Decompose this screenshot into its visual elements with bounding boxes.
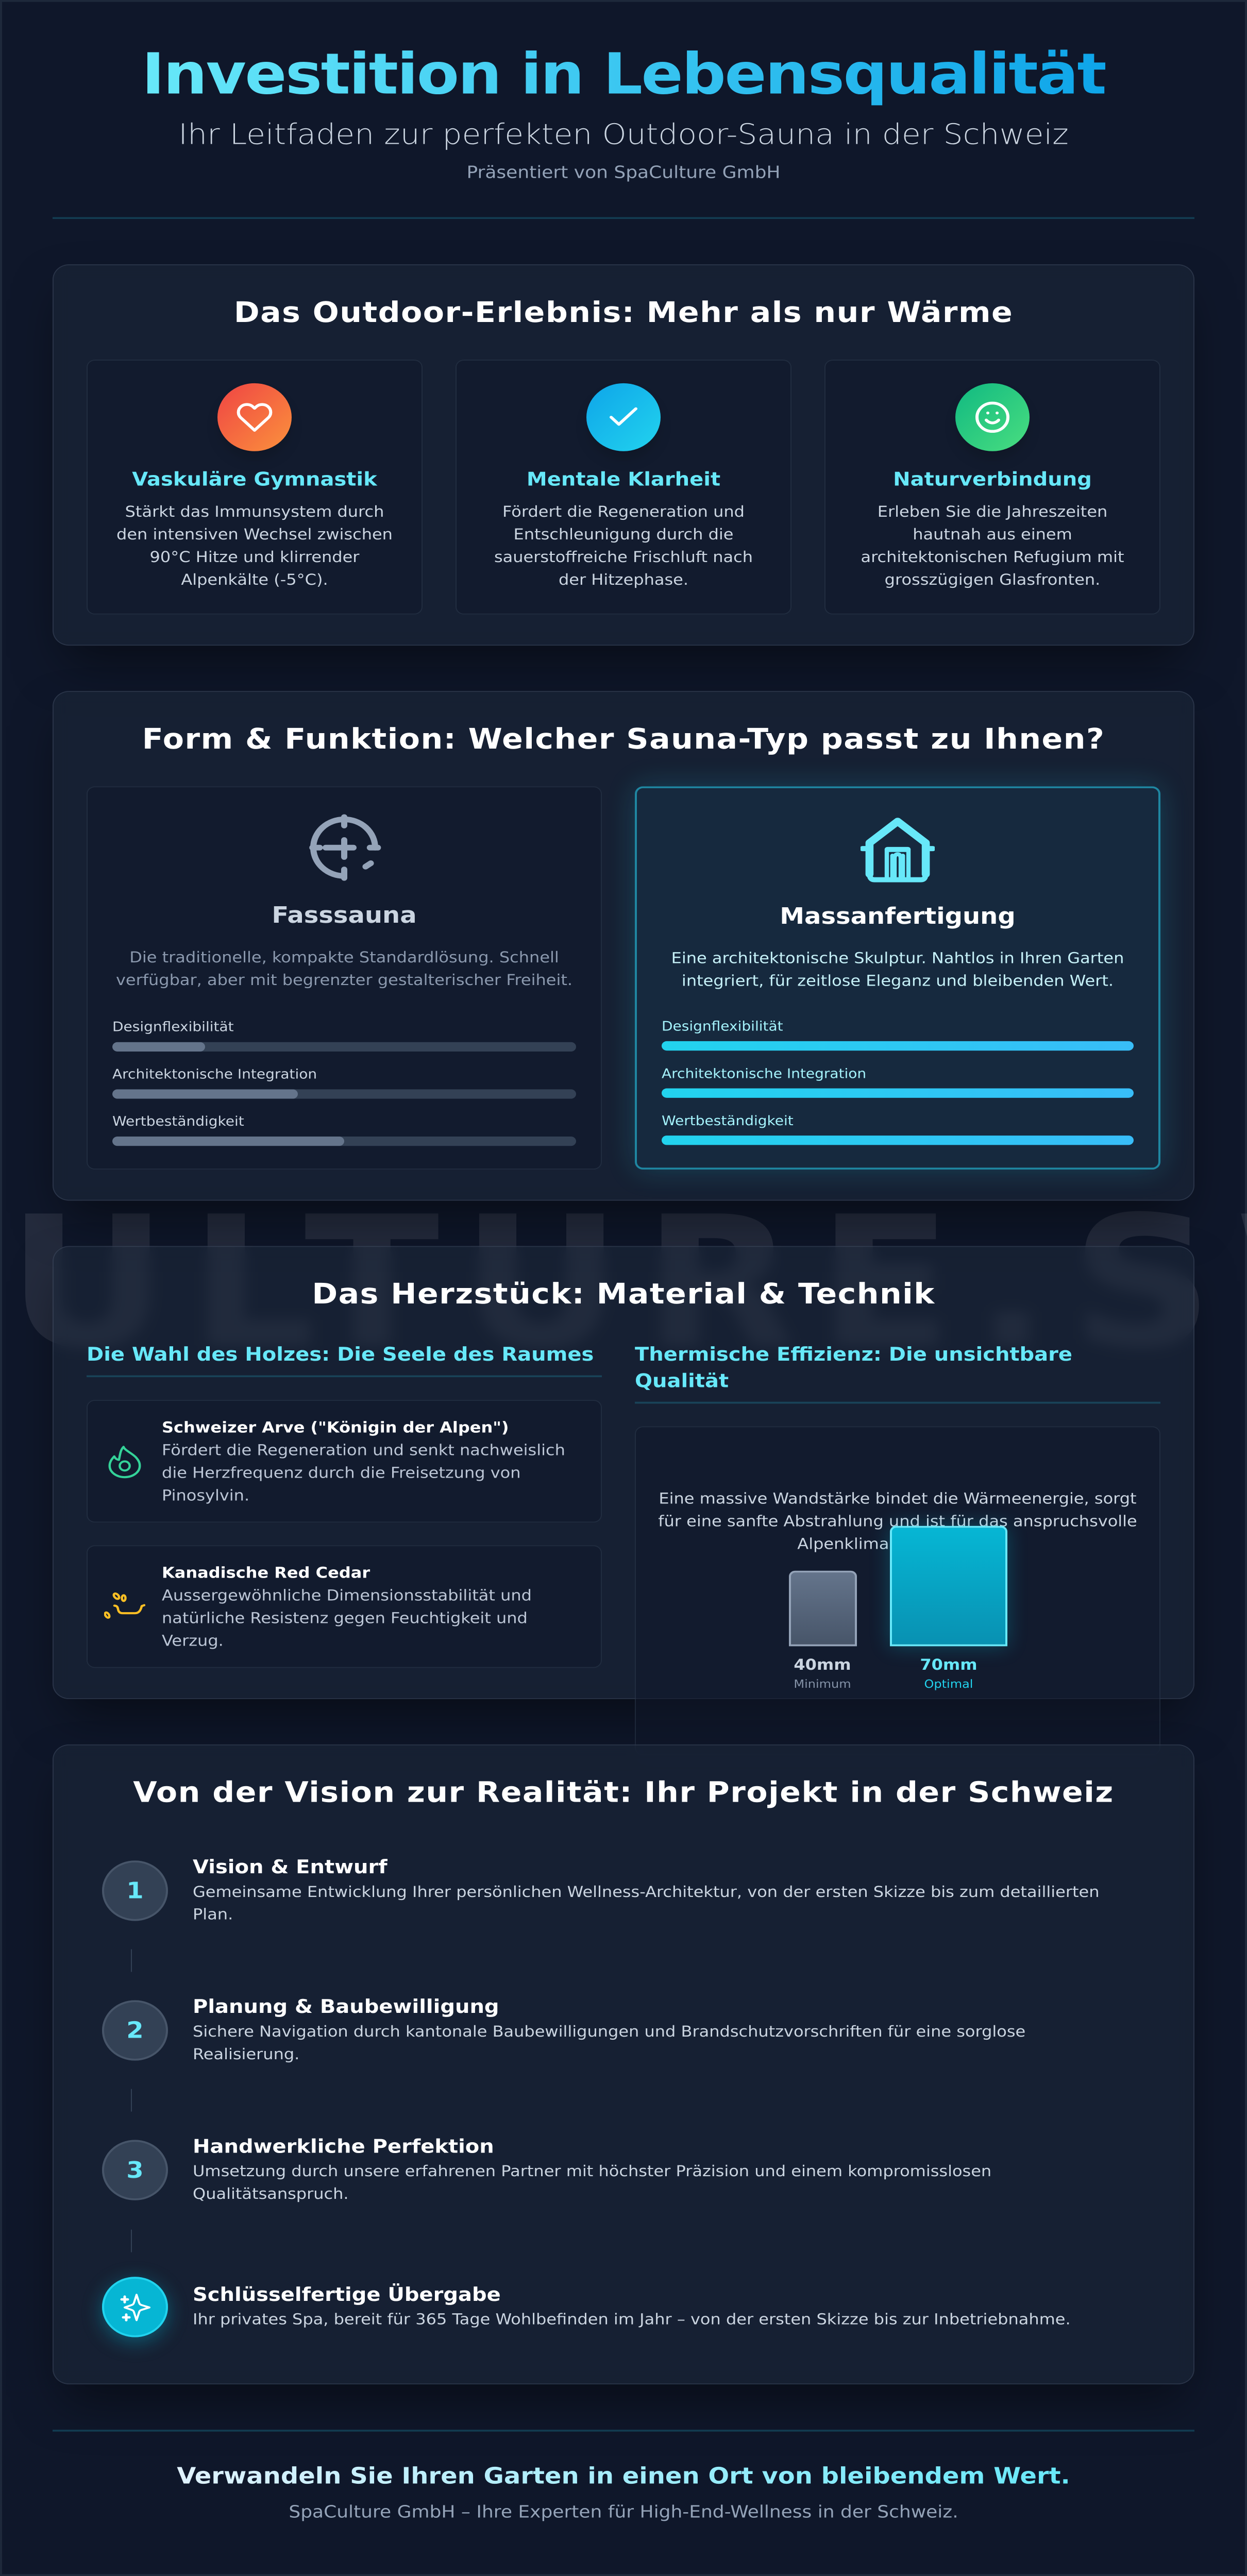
rating: designflexibilität	[662, 1017, 1134, 1050]
wood text	[162, 1561, 532, 1652]
footer	[0, 2430, 1247, 2543]
presenter line: Präsentiert von SpaCulture GmbH	[466, 163, 780, 182]
icon: resin tray	[104, 1588, 145, 1625]
step number	[102, 2000, 168, 2061]
card text	[494, 503, 753, 588]
wood text: Verzug.	[162, 1632, 224, 1650]
wood text: Fördert die Regeneration und senkt nachweislich	[162, 1441, 565, 1459]
step text: Plan.	[193, 1905, 233, 1923]
icon: smile	[955, 383, 1030, 451]
icon: barrel target	[309, 814, 381, 881]
step title: Schlüsselfertige Übergabe	[193, 2284, 501, 2306]
wood text: die Herzfrequenz durch die Freisetzung von	[162, 1464, 521, 1482]
rating: wertbeständigkeit	[662, 1111, 1134, 1145]
step number: 3	[126, 2157, 144, 2183]
heading: Form & Funktion: Welcher Sauna-Typ passt zu Ihnen?	[142, 723, 1105, 756]
subheading: thermal: Thermische Effizienz: Die unsichtbare	[635, 1344, 1072, 1365]
icon: check	[586, 383, 661, 451]
card: naturverbindung	[824, 360, 1160, 615]
step title: Planung & Baubewilligung	[193, 1996, 499, 2018]
card title: Vaskuläre Gymnastik	[132, 469, 377, 490]
bar: 70mm	[890, 1526, 1007, 1646]
step text: Qualitätsanspruch.	[193, 2185, 349, 2202]
card text	[861, 503, 1124, 588]
panel: sauna types	[53, 691, 1194, 1201]
card: vaskuläre gymnastik	[87, 360, 423, 615]
step 2	[102, 1994, 1112, 2069]
card text: der Hitzephase.	[559, 571, 688, 588]
card: wall thickness	[635, 1426, 1160, 1755]
rating: wertbeständigkeit: Wertbeständigkeit	[112, 1113, 244, 1129]
step number: 2	[126, 2017, 144, 2044]
step title: Vision & Entwurf	[193, 1856, 387, 1878]
step text: Realisierung.	[193, 2045, 299, 2063]
subheading: wood	[87, 1342, 602, 1377]
step 4	[102, 2281, 1112, 2338]
rating: architektonische integration: Architektonische Integration	[662, 1066, 866, 1081]
card text: Stärkt das Immunsystem durch	[125, 503, 384, 520]
header	[53, 42, 1194, 219]
card text: 90°C Hitze und klirrender	[150, 548, 359, 566]
icon: heart	[217, 383, 292, 451]
panel: project process	[53, 1744, 1194, 2384]
subheading: thermal: Qualität	[635, 1370, 729, 1392]
step number	[102, 2140, 168, 2200]
card title: Mentale Klarheit	[527, 469, 720, 490]
type description: verfügbar, aber mit begrenzter gestalterischer Freiheit.	[116, 971, 572, 989]
type description	[671, 949, 1124, 990]
connector	[131, 1949, 132, 1972]
label: 70mm: 70mm	[920, 1656, 978, 1673]
wood text: Pinosylvin.	[162, 1486, 249, 1504]
header divider	[53, 217, 1194, 219]
subheading: thermal	[635, 1342, 1160, 1403]
card title: Naturverbindung	[893, 469, 1092, 490]
label: 40mm: 40mm	[794, 1656, 851, 1673]
card text: Alpenkälte (-5°C).	[181, 571, 328, 588]
card text: grosszügigen Glasfronten.	[885, 571, 1100, 588]
connector	[131, 2089, 132, 2112]
step number: 1	[126, 1877, 144, 1904]
wood text	[162, 1416, 565, 1506]
rating: architektonische integration	[112, 1066, 576, 1099]
footer credit: SpaCulture GmbH – Ihre Experten für High-End-Wellness in der Schweiz.	[289, 2502, 958, 2522]
step text	[193, 2160, 991, 2205]
thermal text: Eine massive Wandstärke bindet die Wärmeenergie, sorgt	[659, 1489, 1137, 1507]
footer claim: Verwandeln Sie Ihren Garten in einen Ort von bleibendem Wert.	[177, 2463, 1070, 2489]
card text: Entschleunigung durch die	[514, 526, 733, 543]
label: 70mm: Optimal	[924, 1677, 973, 1690]
type description	[116, 948, 572, 989]
step text: Sichere Navigation durch kantonale Baubewilligungen und Brandschutzvorschriften für eine sorglose	[193, 2022, 1025, 2040]
rating: designflexibilität	[112, 1019, 576, 1052]
step number	[102, 1860, 168, 1921]
panel: outdoor experience	[53, 264, 1194, 646]
icon: flame	[104, 1443, 145, 1480]
wood text: Kanadische Red Cedar	[162, 1564, 370, 1582]
subtitle: Ihr Leitfaden zur perfekten Outdoor-Sauna in der Schweiz	[178, 118, 1069, 151]
label: 40mm	[761, 1653, 884, 1691]
thermal text	[635, 1487, 1160, 1555]
connector	[131, 2230, 132, 2252]
icon: house	[861, 818, 935, 882]
card: canadian red cedar	[87, 1545, 602, 1668]
title: Investition in Lebensqualität	[142, 42, 1105, 107]
card text: Erleben Sie die Jahreszeiten	[878, 503, 1107, 520]
card text: den intensiven Wechsel zwischen	[116, 526, 393, 543]
card text: Fördert die Regeneration und	[502, 503, 745, 520]
step title: Handwerkliche Perfektion	[193, 2136, 494, 2157]
panel: material and technology	[53, 1246, 1194, 1699]
step 3	[102, 2133, 1112, 2209]
heading: Das Outdoor-Erlebnis: Mehr als nur Wärme	[234, 296, 1013, 329]
step 1	[102, 1854, 1112, 1929]
wood text: Aussergewöhnliche Dimensionsstabilität und	[162, 1586, 532, 1604]
card text: hautnah aus einem	[913, 526, 1072, 543]
label: 40mm: Minimum	[794, 1677, 851, 1690]
step text: Gemeinsame Entwicklung Ihrer persönlichen Wellness-Architektur, von der ersten Skizze bis zum detaillierten	[193, 1883, 1100, 1901]
type name: Fasssauna	[272, 902, 417, 928]
step text: Ihr privates Spa, bereit für 365 Tage Wohlbefinden im Jahr – von der ersten Skizze bis zur Inbetriebnahme.	[193, 2310, 1071, 2328]
card text: architektonischen Refugium mit	[861, 548, 1124, 566]
rating: wertbeständigkeit: Wertbeständigkeit	[662, 1113, 794, 1128]
type description: Die traditionelle, kompakte Standardlösung. Schnell	[129, 948, 559, 966]
rating: designflexibilität: Designflexibilität	[662, 1019, 783, 1034]
type description: Eine architektonische Skulptur. Nahtlos in Ihren Garten	[671, 949, 1124, 967]
subheading: wood: Die Wahl des Holzes: Die Seele des Raumes	[87, 1344, 594, 1365]
step text: Umsetzung durch unsere erfahrenen Partner mit höchster Präzision und einem kompromisslosen	[193, 2162, 991, 2180]
rating: designflexibilität: Designflexibilität	[112, 1019, 234, 1035]
wood text: Schweizer Arve ("Königin der Alpen")	[162, 1418, 509, 1436]
card: swiss stone pine	[87, 1400, 602, 1522]
footer divider	[53, 2430, 1194, 2432]
step text	[193, 1880, 1100, 1926]
card: mentale klarheit	[456, 360, 791, 615]
heading: Von der Vision zur Realität: Ihr Projekt in der Schweiz	[133, 1776, 1114, 1809]
heading: Das Herzstück: Material & Technik	[312, 1278, 935, 1311]
step text	[193, 2020, 1025, 2065]
card text	[116, 503, 393, 588]
bar: 40mm	[789, 1571, 857, 1646]
rating: wertbeständigkeit	[112, 1113, 576, 1146]
thermal text: für eine sanfte Abstrahlung und ist für das anspruchsvolle	[658, 1512, 1137, 1530]
rating: architektonische integration: Architektonische Integration	[112, 1066, 317, 1082]
type description: integriert, für zeitlose Eleganz und bleibenden Wert.	[682, 972, 1114, 990]
type name: Massanfertigung	[780, 903, 1016, 929]
card text: sauerstoffreiche Frischluft nach	[494, 548, 753, 566]
icon: sparkles	[102, 2277, 168, 2337]
label: 70mm	[887, 1653, 1010, 1691]
card: fasssauna	[87, 786, 602, 1170]
wood text: natürliche Resistenz gegen Feuchtigkeit und	[162, 1609, 528, 1627]
rating: architektonische integration	[662, 1064, 1134, 1098]
card: massanfertigung	[635, 786, 1160, 1170]
thermal text: Alpenklima unerlässlich.	[797, 1535, 998, 1553]
